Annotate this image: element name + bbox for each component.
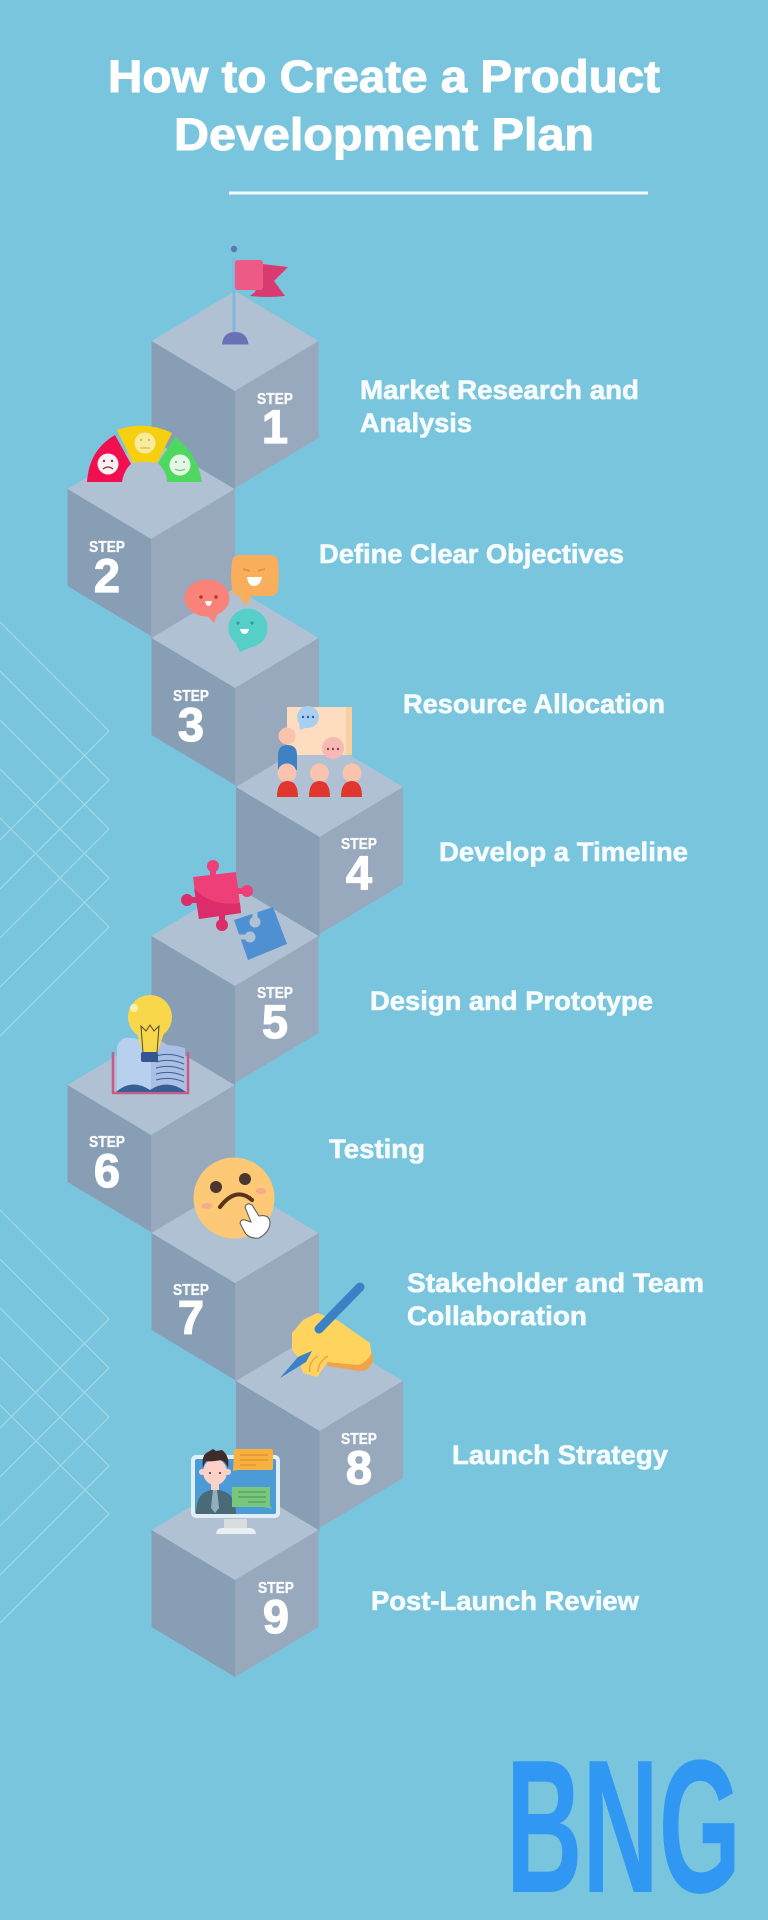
step 1 cube	[152, 291, 318, 491]
step 9 cube: 9	[263, 1590, 289, 1643]
label: step 2: Define Clear Objectives	[319, 539, 624, 569]
step 4 cube	[236, 737, 403, 937]
title	[108, 51, 660, 160]
title: How to Create a Product	[108, 51, 660, 102]
step 6 cube	[68, 1035, 235, 1235]
step 3 cube: STEP	[173, 688, 209, 705]
step 8 cube	[236, 1331, 403, 1532]
step 1 cube: 1	[262, 400, 288, 453]
label: step 4: Develop a Timeline	[439, 837, 688, 867]
label: step 1: Market Research and	[360, 375, 639, 405]
step 4 cube: 4	[346, 846, 372, 899]
icon: puzzle pieces	[181, 860, 287, 960]
step 7 cube: 7	[178, 1291, 204, 1344]
step 9 cube: STEP	[258, 1580, 294, 1597]
icon: book and light bulb	[113, 995, 188, 1093]
step 5 cube	[152, 886, 318, 1086]
title: Development Plan	[174, 109, 594, 160]
icon: flag	[222, 246, 288, 344]
icon: team meeting	[277, 706, 362, 797]
icon: writing hand	[280, 1287, 373, 1378]
step 3 cube	[152, 588, 319, 788]
step 7 cube: STEP	[173, 1282, 209, 1299]
label: step 9: Post-Launch Review	[371, 1586, 640, 1616]
label: step 8: Launch Strategy	[452, 1440, 668, 1470]
step 8 cube: 8	[346, 1441, 372, 1494]
step 3 cube: 3	[178, 698, 204, 751]
icon: thinking face	[194, 1158, 274, 1238]
label: step 7	[407, 1268, 704, 1331]
step 1 cube: STEP	[257, 391, 293, 408]
label: step 3: Resource Allocation	[403, 689, 665, 719]
label: step 7: Collaboration	[407, 1301, 587, 1331]
step 6 cube: STEP	[89, 1134, 125, 1151]
icon: chat bubbles	[184, 555, 279, 652]
icon: video call monitor	[191, 1449, 280, 1534]
label: step 1	[360, 375, 639, 438]
step 6 cube: 6	[94, 1144, 120, 1197]
step 8 cube: STEP	[341, 1431, 377, 1448]
step 5 cube: 5	[262, 995, 288, 1048]
step 9 cube	[152, 1480, 318, 1677]
step 4 cube: STEP	[341, 836, 377, 853]
label: step 5: Design and Prototype	[370, 986, 653, 1016]
step 2 cube: 2	[94, 549, 120, 602]
step 2 cube: STEP	[89, 539, 125, 556]
step 7 cube	[152, 1183, 319, 1383]
step 2 cube	[68, 439, 235, 639]
icon: satisfaction gauge	[87, 426, 202, 482]
label: step 1: Analysis	[360, 408, 472, 438]
step 5 cube: STEP	[257, 985, 293, 1002]
label: step 7: Stakeholder and Team	[407, 1268, 704, 1298]
label: step 6: Testing	[329, 1134, 425, 1164]
